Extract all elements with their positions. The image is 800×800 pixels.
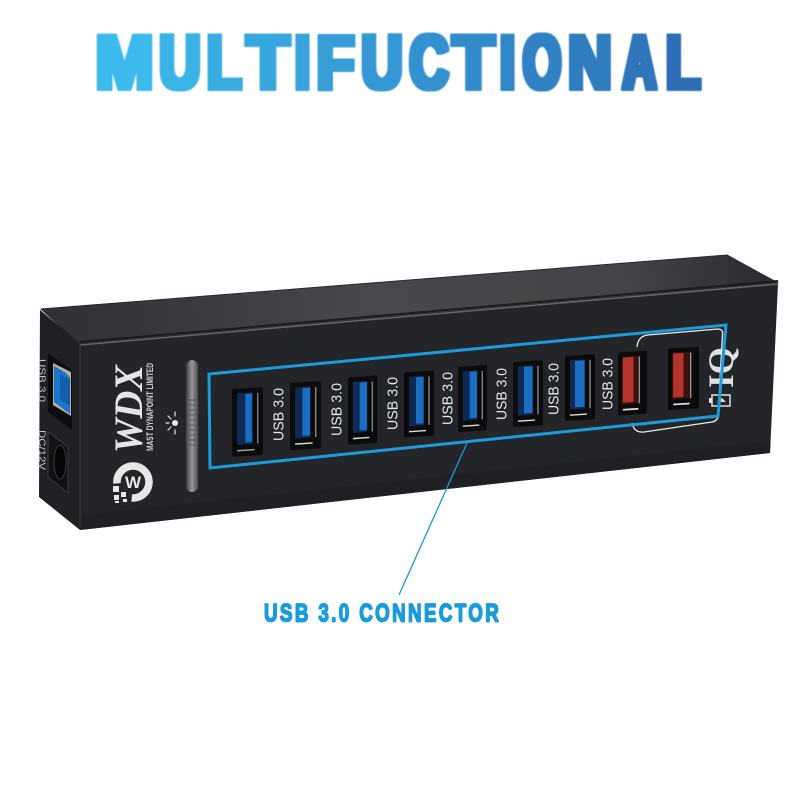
title: T xyxy=(453,20,494,106)
DC power port xyxy=(48,432,68,493)
brand logo xyxy=(106,363,155,503)
IQ charging mark xyxy=(701,347,741,406)
icon: light xyxy=(166,412,178,434)
title: U xyxy=(362,20,402,106)
title: L xyxy=(207,20,241,106)
USB 3.0 port labels: USB 3.0 xyxy=(384,377,402,430)
USB 3.0 port labels: USB 3.0 xyxy=(440,372,456,425)
USB 3.0 port labels: USB 3.0 xyxy=(546,363,562,415)
port 2 xyxy=(290,381,321,450)
USB 3.0 port labels: USB 3.0 xyxy=(600,358,616,410)
round emblem: W xyxy=(125,473,142,492)
LED indicator strip xyxy=(186,360,198,492)
left face xyxy=(39,310,80,530)
WDX wordmark: WDX xyxy=(106,364,151,453)
title: U xyxy=(160,20,200,106)
port 8: red xyxy=(618,351,647,416)
IQ charging mark: IQ xyxy=(701,347,741,388)
port 5 xyxy=(458,365,487,432)
USB 3.0 port labels xyxy=(270,358,616,441)
left face labels: USB 3.0 xyxy=(37,359,47,402)
title: L xyxy=(666,20,700,106)
port 6 xyxy=(513,360,543,427)
title: N xyxy=(568,20,612,106)
left face labels: DC/12V xyxy=(37,430,47,470)
white rounded frame xyxy=(632,329,723,432)
front face xyxy=(80,284,778,530)
USB 3.0 port labels: USB 3.0 xyxy=(270,388,288,441)
title: I xyxy=(500,20,515,106)
title: F xyxy=(317,20,354,106)
left face labels xyxy=(37,359,47,470)
USB-B port xyxy=(48,353,72,430)
title: A xyxy=(623,20,656,106)
round emblem xyxy=(113,465,150,503)
USB 3.0 port labels: USB 3.0 xyxy=(494,368,510,420)
USB 3.0 port labels: USB 3.0 xyxy=(328,383,346,436)
USB 3.0 ports xyxy=(232,347,699,457)
port 7 xyxy=(565,354,595,421)
leader line xyxy=(399,443,467,595)
top face xyxy=(41,255,778,344)
port 4 xyxy=(404,371,434,438)
blue highlight rectangle xyxy=(209,325,726,468)
title: M xyxy=(96,20,154,106)
company name: MAST DYNAPOINT LIMITED xyxy=(145,363,155,451)
title: O xyxy=(523,20,561,106)
title: T xyxy=(247,20,289,106)
USB hub device xyxy=(37,255,778,530)
title xyxy=(96,20,700,106)
port 3 xyxy=(348,375,377,445)
title: I xyxy=(295,20,310,106)
title: C xyxy=(410,20,448,106)
port 9: red xyxy=(668,347,699,410)
icon: battery xyxy=(709,395,730,406)
port 1 xyxy=(232,387,263,457)
caption: USB 3.0 CONNECTOR xyxy=(264,599,501,627)
